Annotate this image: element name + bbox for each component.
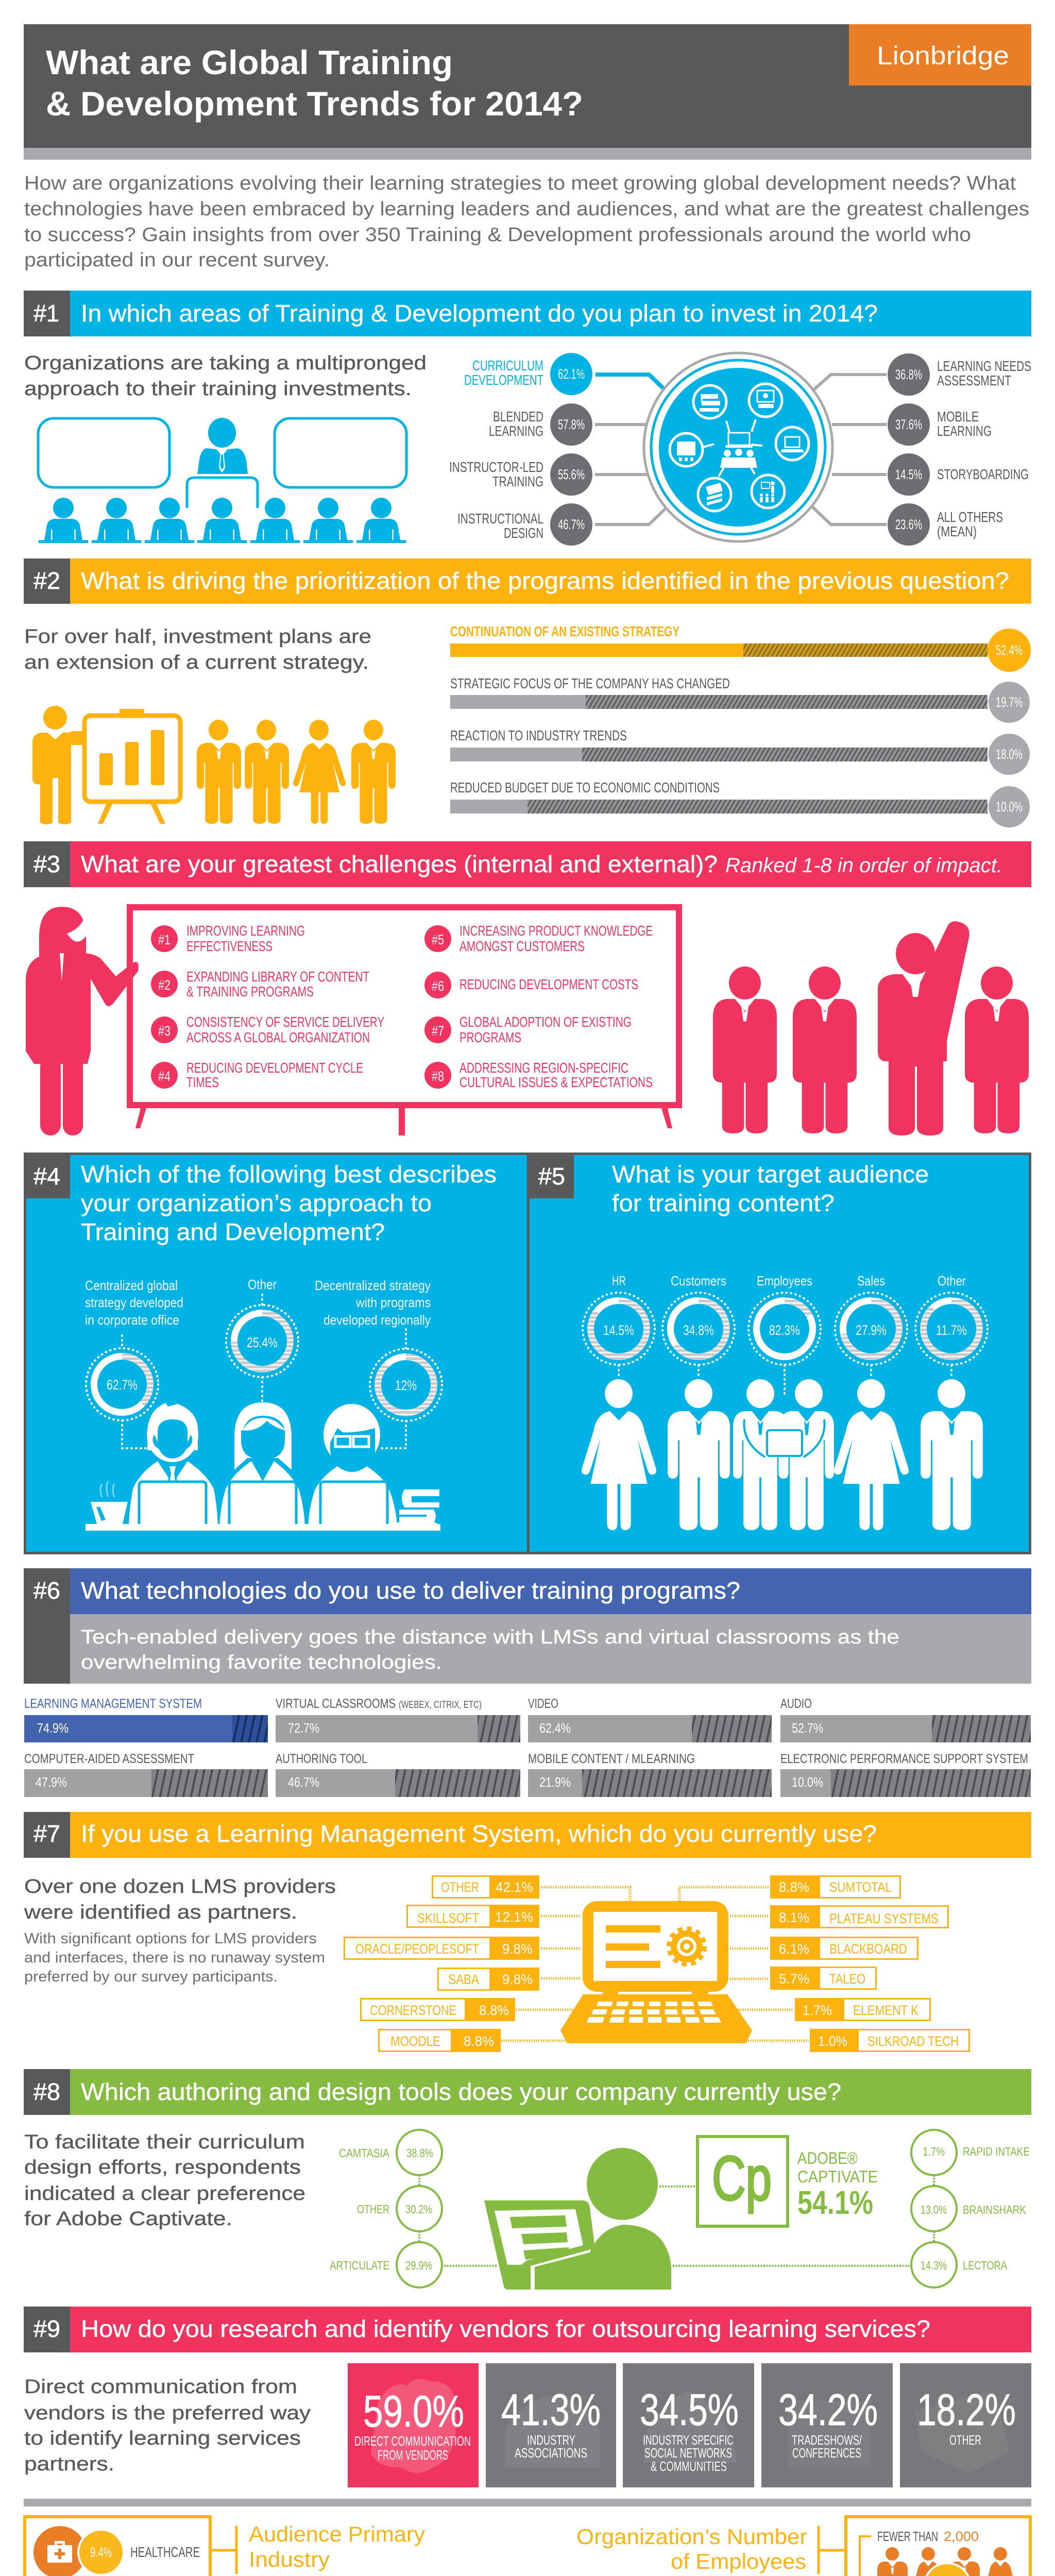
chart: target audience donuts: Sales [857,1273,885,1289]
heading: organization's number of employees: of Employees [671,2549,806,2573]
text: question 6 takeaway: overwhelming favorite technologies. [81,1652,442,1673]
card: other: 18.2% [917,2385,1016,2435]
chart: target audience donuts [580,1273,991,1394]
heading: organization's number of employees [576,2524,845,2574]
group: fewer than 2,000 [860,2529,1017,2576]
labels: right providers: SILKROAD TECH [867,2033,959,2049]
card: social networks [623,2363,754,2487]
left bubbles: BLENDED [493,409,543,425]
heading: question 5 [528,1153,929,1216]
bar: reduced budget: REDUCED BUDGET DUE TO ECONOMIC CONDITIONS [450,779,720,795]
card: direct communication: FROM VENDORS [378,2447,448,2463]
right bubbles: MOBILE [937,409,979,425]
chart: target audience donuts: 82.3% [769,1323,800,1338]
group: fewer than 2,000: FEWER THAN [877,2529,938,2544]
chart: technologies bars: COMPUTER-AIDED ASSESSMENT [24,1752,194,1766]
labels: right providers: 1.7% [803,2003,832,2018]
heading: question 2: What is driving the prioritization of the programs identified in the previous question? [81,567,1009,594]
labels: right providers: PLATEAU SYSTEMS [829,1911,939,1926]
chart: LMS providers around laptop [344,1875,969,2052]
list: right column [424,923,653,1090]
bar: continuation of an existing strategy: 52.4% [996,642,1023,658]
labels: right providers: 1.0% [818,2033,847,2049]
list: left column: #2 [158,977,171,993]
chart: approach labels and donuts [82,1277,446,1448]
left bubbles: 46.7% [558,517,585,532]
intro text: How are organizations evolving their learning strategies to meet growing global development needs? What [24,173,1016,194]
right bubbles: 14.5% [895,467,922,482]
heading: question 8: Which authoring and design tools does your company currently use? [81,2078,841,2105]
text: question 1 takeaway: approach to their training investments. [24,378,412,400]
text: question 8 takeaway: indicated a clear preference [24,2183,305,2205]
list: left column: EFFECTIVENESS [186,938,273,954]
right bubbles: 23.6% [895,517,922,532]
chart: approach labels and donuts: in corporate office [85,1312,179,1328]
text: question 9 takeaway: Direct communication from [24,2376,297,2398]
left bubbles: 62.1% [558,366,585,382]
intro text: technologies have been embraced by learning leaders and audiences, and what are the greatest challenges [24,198,1029,220]
bar values: 62.4% [539,1720,571,1736]
bar values: 47.9% [36,1774,67,1790]
labels: left providers [344,1875,539,2052]
bar: reaction to industry trends [450,727,1030,775]
heading: question 7: If you use a Learning Management System, which do you currently use? [81,1820,877,1847]
labels: right providers: TALEO [829,1971,865,1987]
heading: question 7 [24,1812,1031,1858]
bar: strategic focus changed: STRATEGIC FOCUS OF THE COMPANY HAS CHANGED [450,675,730,691]
heading: question 1: In which areas of Training & Development do you plan to invest in 2014? [81,300,878,327]
heading: audience primary industry: Industry [249,2547,330,2571]
heading: question 5: #5 [538,1163,565,1190]
intro text: participated in our recent survey. [24,249,330,271]
card: social networks: SOCIAL NETWORKS [644,2445,732,2461]
connectors [595,375,887,524]
card: direct communication [348,2363,479,2487]
text: question 7 takeaway: were identified as partners. [24,1902,297,1923]
heading: question 6 [24,1568,1031,1684]
list: right column: AMONGST CUSTOMERS [460,938,585,954]
left tool labels: 38.8% [406,2146,433,2160]
heading: question 8 [24,2069,1031,2115]
card: tradeshows: 34.2% [778,2385,878,2435]
list: right column: CULTURAL ISSUES & EXPECTATIONS [460,1074,653,1090]
panel: audience primary industry [25,2517,210,2576]
chart: technologies bars: MOBILE CONTENT / MLEARNING [528,1752,695,1766]
list: right column: PROGRAMS [460,1029,521,1045]
list: left column: & TRAINING PROGRAMS [186,984,314,999]
left tool labels [330,2146,433,2272]
right bubbles [888,353,1031,546]
list: left column: CONSISTENCY OF SERVICE DELIVERY [186,1014,384,1030]
card: industry associations: INDUSTRY [527,2432,575,2448]
chart: authoring tools [330,2130,1030,2290]
callout: Adobe Captivate [697,2137,878,2226]
chart: target audience donuts: Employees [757,1273,812,1289]
labels: left providers: 12.1% [495,1909,533,1925]
heading: audience primary industry [210,2522,425,2574]
chart: technologies bars: AUTHORING TOOL [276,1752,367,1766]
chart: target audience donuts: 14.5% [603,1323,634,1338]
bars [24,1715,1031,1797]
chart: target audience donuts: 34.8% [683,1323,714,1338]
title: & Development Trends for 2014? [46,84,583,123]
list: left column [151,923,384,1090]
right tool labels: LECTORA [963,2259,1008,2272]
list: right column: #6 [432,978,444,994]
list: right column: ADDRESSING REGION-SPECIFIC [460,1060,628,1076]
chart: approach labels and donuts: 12% [395,1378,417,1393]
heading: question 4: Which of the following best describes [81,1161,497,1188]
chart: technologies bars: AUDIO [780,1697,812,1711]
labels: right providers: 6.1% [779,1941,809,1957]
intro text: to success? Gain insights from over 350 Training & Development professionals around the world who [24,224,971,246]
heading: question 4: your organization’s approach to [81,1190,432,1216]
text: question 6 takeaway [81,1626,899,1673]
illustration: woman presenter [26,907,139,1136]
logo: Lionbridge: Lionbridge [877,41,1009,70]
chart: approach labels and donuts: Decentralized strategy [315,1278,431,1293]
text: question 7 takeaway: and interfaces, there is no runaway system [24,1950,325,1966]
callout: Adobe Captivate: 54.1% [797,2184,873,2221]
row: healthcare: HEALTHCARE [130,2544,200,2560]
text: question 8 takeaway: for Adobe Captivate. [24,2208,232,2230]
chart: target audience donuts: 11.7% [936,1323,967,1338]
right bubbles: 37.6% [895,417,922,432]
callout: Adobe Captivate: Cp [712,2143,772,2213]
list: left column: #3 [158,1023,171,1039]
intro text [24,173,1029,271]
logo: Lionbridge [849,24,1031,86]
labels: left providers: 42.1% [496,1879,533,1895]
bar values: 46.7% [288,1774,319,1790]
labels: left providers: SABA [448,1972,479,1987]
card: direct communication: 59.0% [363,2387,464,2436]
bar: strategic focus changed [450,675,1030,723]
labels: right providers [770,1875,969,2052]
heading: organization's number of employees: Organization’s Number [576,2524,807,2549]
right bubbles: ALL OTHERS [937,509,1003,525]
heading: question 9 [24,2307,1031,2352]
labels: right providers: ELEMENT K [853,2003,918,2018]
dotted connectors [501,1887,809,2041]
bar values: 21.9% [539,1774,571,1790]
illustration: presenter and audience [38,418,406,543]
labels: left providers: 8.8% [464,2033,494,2049]
left bubbles: CURRICULUM [472,358,543,374]
heading: question 3: #3 [33,851,60,877]
title: What are Global Training [46,43,453,81]
panel: questions 4 and 5 [24,1153,1030,1554]
man [129,1403,218,1531]
bar: continuation of an existing strategy: CONTINUATION OF AN EXISTING STRATEGY [450,623,679,639]
chart: target audience donuts: 27.9% [856,1323,887,1338]
chart: technologies bars: (WEBEX, CITRIX, ETC) [399,1700,482,1710]
chart: approach labels and donuts: with programs [355,1295,431,1310]
group: fewer than 2,000: 2,000 [944,2529,979,2544]
heading: question 5: for training content? [612,1190,835,1216]
title banner [24,24,1031,160]
left tool labels: ARTICULATE [330,2259,389,2272]
bar values [36,1720,823,1790]
right tool labels: BRAINSHARK [963,2203,1027,2216]
chart: investment areas radial diagram [449,353,1031,546]
chart: technologies bars: LEARNING MANAGEMENT SYSTEM [24,1697,202,1711]
card: industry associations [486,2363,616,2487]
heading: question 5: What is your target audience [612,1161,929,1188]
chart: approach labels and donuts: 62.7% [107,1377,138,1393]
text: question 8 takeaway [24,2131,305,2230]
chart: technologies bars: VIDEO [528,1697,558,1711]
labels: left providers: MOODLE [390,2033,440,2049]
list: left column: #1 [158,932,171,947]
labels: right providers: 8.1% [779,1910,809,1925]
icon: person with tablet [484,2148,671,2290]
right tool labels: 13.0% [921,2203,947,2216]
labels: left providers: 8.8% [479,2003,509,2018]
labels: left providers: SKILLSOFT [417,1910,479,1926]
list: right column: #5 [432,932,444,947]
text: question 2 takeaway: For over half, investment plans are [24,626,371,648]
chart: approach labels and donuts: Centralized global [85,1278,178,1293]
heading: question 4 [24,1153,497,1245]
bar values: 10.0% [792,1774,823,1790]
callout: Adobe Captivate: CAPTIVATE [797,2167,878,2186]
row: healthcare [33,2526,200,2576]
right bubbles: ASSESSMENT [937,372,1011,388]
title [46,43,583,123]
text: question 1 takeaway: Organizations are taking a multipronged [24,352,427,374]
heading: question 2: #2 [33,567,60,594]
list: left column: ACROSS A GLOBAL ORGANIZATION [186,1029,370,1045]
row: healthcare: 9.4% [90,2545,112,2560]
left bubbles: TRAINING [492,473,543,489]
card: tradeshows [761,2363,893,2487]
chart: approach labels and donuts: strategy developed [85,1295,183,1310]
illustration: audience with raised hand [713,921,1029,1136]
list: left column: EXPANDING LIBRARY OF CONTENT [186,969,369,985]
chart: approach labels and donuts: developed regionally [324,1312,431,1328]
labels: right providers: 5.7% [779,1971,809,1987]
text: question 7 takeaway [24,1876,336,1985]
card: tradeshows: CONFERENCES [792,2445,861,2461]
card: industry associations: 41.3% [501,2385,601,2435]
bar: reaction to industry trends: 18.0% [996,747,1023,762]
labels: right providers: 8.8% [779,1879,809,1895]
list: right column: INCREASING PRODUCT KNOWLEDGE [460,923,653,939]
list: right column: #7 [432,1023,444,1039]
chart: technologies bars: VIRTUAL CLASSROOMS [276,1697,396,1711]
left bubbles: INSTRUCTOR-LED [449,459,543,475]
icon: laptop [560,1901,752,2043]
hub circle [644,353,832,541]
woman [219,1402,305,1531]
heading: question 3 [24,841,1031,887]
bar: reduced budget: 10.0% [996,799,1023,815]
text: question 6 takeaway: Tech-enabled delivery goes the distance with LMSs and virtual classrooms as the [81,1626,899,1648]
bar: continuation of an existing strategy [450,623,1031,672]
right tool labels [921,2145,1030,2272]
heading: question 3: Ranked 1-8 in order of impact. [725,854,1002,877]
bar: reaction to industry trends: REACTION TO INDUSTRY TRENDS [450,727,627,743]
desk with coffee and books [86,1481,440,1531]
cards: vendor research methods [348,2363,1031,2487]
left tool labels: OTHER [357,2202,389,2216]
card: industry associations: ASSOCIATIONS [515,2445,587,2461]
list: right column: GLOBAL ADOPTION OF EXISTING [460,1014,632,1030]
chart: approach labels and donuts: 25.4% [247,1335,278,1350]
labels: left providers: 9.8% [502,1972,533,1987]
card: social networks: INDUSTRY SPECIFIC [643,2432,734,2448]
heading: question 8: #8 [33,2078,60,2105]
list: right column: #8 [432,1069,444,1084]
illustration: three people at laptops [86,1402,440,1531]
card: tradeshows: TRADESHOWS/ [792,2432,862,2448]
chart: programs prioritization bars [450,623,1031,827]
heading: question 2 [24,558,1031,604]
bar: reduced budget [450,779,1030,827]
text: question 8 takeaway: To facilitate their curriculum [24,2131,305,2153]
text: question 9 takeaway: partners. [24,2453,114,2475]
bar values: 52.7% [792,1720,823,1736]
labels: left providers: ORACLE/PEOPLESOFT [355,1941,479,1957]
heading: question 6: #6 [33,1577,60,1604]
labels: left providers: CORNERSTONE [370,2003,456,2018]
text: question 2 takeaway: an extension of a current strategy. [24,652,369,673]
heading: audience primary industry: Audience Primary [249,2522,425,2546]
text: question 7 takeaway: preferred by our survey participants. [24,1969,278,1985]
chart: target audience donuts: Other [938,1273,966,1289]
heading: question 1 [24,291,1031,336]
callout: Adobe Captivate: ADOBE® [797,2149,858,2167]
illustration: five audience figures [582,1379,983,1530]
bar values: 74.9% [37,1720,69,1736]
right tool labels: RAPID INTAKE [963,2145,1030,2158]
heading: question 6: What technologies do you use to deliver training programs? [81,1577,740,1604]
left bubbles: 57.8% [558,417,585,432]
list: left column: IMPROVING LEARNING [186,923,305,939]
left bubbles: 55.6% [558,467,585,482]
left bubbles: LEARNING [489,423,543,439]
chart: target audience donuts: HR [612,1273,626,1289]
list: left column: TIMES [186,1074,219,1090]
list: right column: REDUCING DEVELOPMENT COSTS [460,976,638,992]
left bubbles [449,353,592,546]
heading: question 7: #7 [33,1820,60,1847]
text: question 8 takeaway: design efforts, respondents [24,2157,301,2178]
list: left column: #4 [158,1069,171,1084]
heading: question 9: How do you research and identify vendors for outsourcing learning services? [81,2315,930,2342]
text: question 2 takeaway [24,626,371,673]
heading: question 9: #9 [33,2315,60,2342]
card: other [900,2363,1031,2487]
heading: question 1: #1 [33,300,59,327]
card: other: OTHER [949,2432,981,2448]
card: social networks: & COMMUNITIES [651,2459,727,2474]
right bubbles: 36.8% [895,367,922,382]
left tool circles [397,2130,442,2287]
bar: strategic focus changed: 19.7% [996,694,1023,710]
right tool labels: 14.3% [921,2259,947,2272]
left tool labels: 30.2% [405,2202,432,2216]
panel: organization size [846,2517,1030,2576]
right bubbles: (MEAN) [937,523,977,539]
text: question 9 takeaway: to identify learning services [24,2428,301,2449]
list: left column: REDUCING DEVELOPMENT CYCLE [186,1060,363,1076]
chart: approach labels and donuts: Other [248,1277,277,1292]
person with glasses [308,1404,397,1531]
right tool circles [911,2130,957,2287]
right tool labels: 1.7% [923,2145,945,2158]
text: question 1 takeaway [24,352,427,400]
heading: question 3: What are your greatest challenges (internal and external)? [81,851,718,877]
left bubbles: DEVELOPMENT [464,372,543,388]
left tool labels: CAMTASIA [339,2146,390,2160]
card: social networks: 34.5% [640,2385,739,2435]
left tool labels: 29.9% [405,2259,432,2272]
heading: question 4: Training and Development? [81,1218,385,1245]
left bubbles: DESIGN [504,525,543,541]
labels: left providers: OTHER [441,1879,479,1895]
right bubbles: LEARNING [937,423,992,439]
illustration: presenter with chart board and team [32,706,396,824]
text: question 7 takeaway: With significant options for LMS providers [24,1930,317,1947]
text: question 9 takeaway: vendors is the preferred way [24,2402,311,2424]
labels: right providers: SUMTOTAL [829,1879,892,1895]
text: question 7 takeaway: Over one dozen LMS providers [24,1876,336,1897]
left bubbles: INSTRUCTIONAL [457,511,543,527]
chart: target audience donuts: Customers [671,1273,726,1289]
chart: technologies bars [24,1697,1031,1797]
heading: question 4: #4 [33,1163,60,1190]
bar values: 72.7% [288,1720,319,1736]
labels: right providers: BLACKBOARD [829,1941,907,1957]
card: direct communication: DIRECT COMMUNICATION [354,2433,471,2449]
labels: left providers: 9.8% [502,1941,533,1957]
panel: ranked challenges board [127,904,682,1136]
text: question 9 takeaway [24,2376,311,2475]
